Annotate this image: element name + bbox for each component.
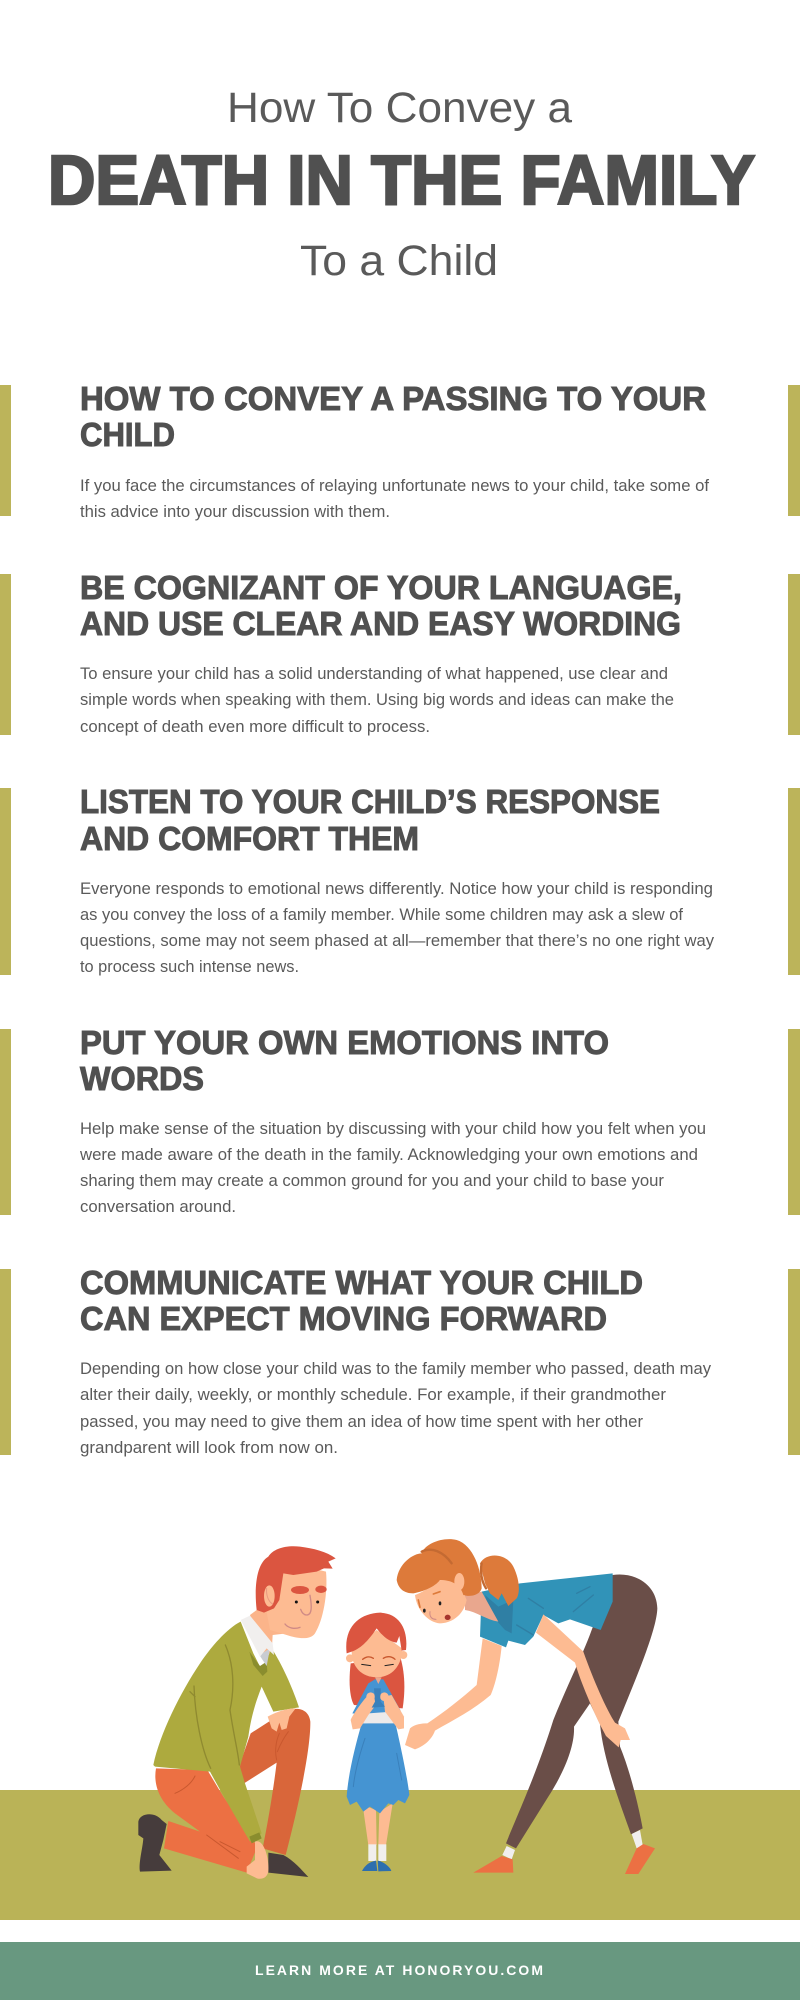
panel: what to expect: [0, 1265, 800, 1457]
panel: what to expect: alter their daily, weekly, or monthly schedule. For example, if their grandmother: [80, 1386, 667, 1404]
panel: listen and comfort: questions, some may not seem phased at all—remember that there’s no one right way: [80, 932, 715, 950]
illustration: crying girl: [346, 1613, 409, 1871]
panel: your own emotions: Help make sense of the situation by discussing with your child how you felt when you: [80, 1120, 706, 1138]
illustration: bending mother: [397, 1539, 657, 1874]
panel: your own emotions: sharing them may create a common ground for you and your child to base your: [80, 1172, 665, 1190]
panel: how to convey a passing: [0, 381, 800, 521]
panel: listen and comfort: AND COMFORT THEM: [80, 821, 419, 858]
panel: listen and comfort: to process such intense news.: [80, 958, 299, 976]
title: DEATH IN THE FAMILY: [48, 141, 755, 219]
panel: what to expect: Depending on how close your child was to the family member who passed, death may: [80, 1360, 712, 1378]
panel: what to expect: CAN EXPECT MOVING FORWARD: [80, 1301, 607, 1338]
panel: your own emotions: [0, 1025, 800, 1216]
panel: clear and easy wording: To ensure your child has a solid understanding of what happened, use clear and: [80, 665, 668, 683]
panel: how to convey a passing: CHILD: [80, 417, 175, 454]
panel: what to expect: grandparent will look from now on.: [80, 1439, 338, 1457]
panel: how to convey a passing: HOW TO CONVEY A PASSING TO YOUR: [80, 381, 706, 418]
illustration: kneeling father: [138, 1546, 336, 1879]
panel: listen and comfort: [0, 784, 800, 976]
footer text: LEARN MORE AT HONORYOU.COM: [255, 1963, 545, 1978]
panel: listen and comfort: LISTEN TO YOUR CHILD’S RESPONSE: [80, 784, 660, 821]
panel: how to convey a passing: this advice into your discussion with them.: [80, 503, 390, 521]
panel: clear and easy wording: AND USE CLEAR AND EASY WORDING: [80, 606, 681, 643]
panel: your own emotions: were made aware of the death in the family. Acknowledging your own emotions and: [79, 1146, 698, 1164]
panel: clear and easy wording: concept of death even more difficult to process.: [80, 718, 430, 736]
title: To a Child: [300, 237, 498, 285]
panel: clear and easy wording: BE COGNIZANT OF YOUR LANGUAGE,: [80, 570, 682, 607]
panel: what to expect: passed, you may need to give them an idea of how time spent with her other: [80, 1413, 644, 1431]
panel: clear and easy wording: simple words when speaking with them. Using big words and ideas can make the: [80, 691, 674, 709]
panel: clear and easy wording: [0, 570, 800, 736]
panel: listen and comfort: Everyone responds to emotional news differently. Notice how your child is responding: [80, 880, 713, 898]
panel: your own emotions: WORDS: [80, 1061, 204, 1098]
title: [48, 84, 755, 285]
title: How To Convey a: [227, 84, 572, 132]
panel: listen and comfort: as you convey the loss of a family member. While some children may ask a slew of: [80, 906, 684, 924]
panel: how to convey a passing: If you face the circumstances of relaying unfortunate news to your child, take some of: [80, 477, 710, 495]
panel: your own emotions: PUT YOUR OWN EMOTIONS INTO: [80, 1025, 609, 1062]
panel: your own emotions: conversation around.: [80, 1198, 236, 1216]
ground band: [0, 1790, 800, 1920]
panel: what to expect: COMMUNICATE WHAT YOUR CHILD: [80, 1265, 643, 1302]
footer bar: [0, 1942, 800, 2000]
